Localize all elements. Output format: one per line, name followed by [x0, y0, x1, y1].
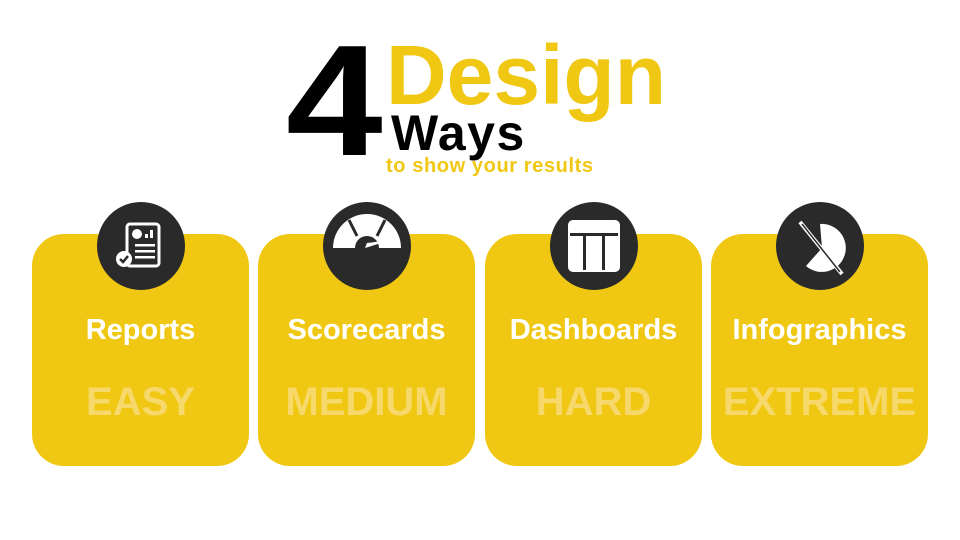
text: reports: Reports: [86, 314, 195, 346]
icon: report: [97, 202, 185, 290]
text: infographics: Infographics: [732, 314, 906, 346]
panel: dashboards: [485, 234, 702, 466]
heading Ways: Ways: [391, 105, 526, 161]
heading Design: Design: [386, 28, 666, 122]
panel: infographics: [711, 234, 928, 466]
level: medium: MEDIUM: [285, 380, 448, 424]
icon: gauge: [323, 202, 411, 290]
icon: palette: [776, 202, 864, 290]
subtitle: to show your results: [386, 155, 594, 177]
icon: dashboard: [550, 202, 638, 290]
title: [286, 13, 666, 189]
text: dashboards: Dashboards: [510, 314, 677, 346]
level: easy: EASY: [86, 380, 195, 424]
panel: reports: [32, 234, 249, 466]
level: extreme: EXTREME: [723, 380, 916, 424]
level: hard: HARD: [536, 380, 651, 424]
text: scorecards: Scorecards: [288, 314, 446, 346]
panel: scorecards: [258, 234, 475, 466]
number 4: 4: [286, 13, 383, 189]
